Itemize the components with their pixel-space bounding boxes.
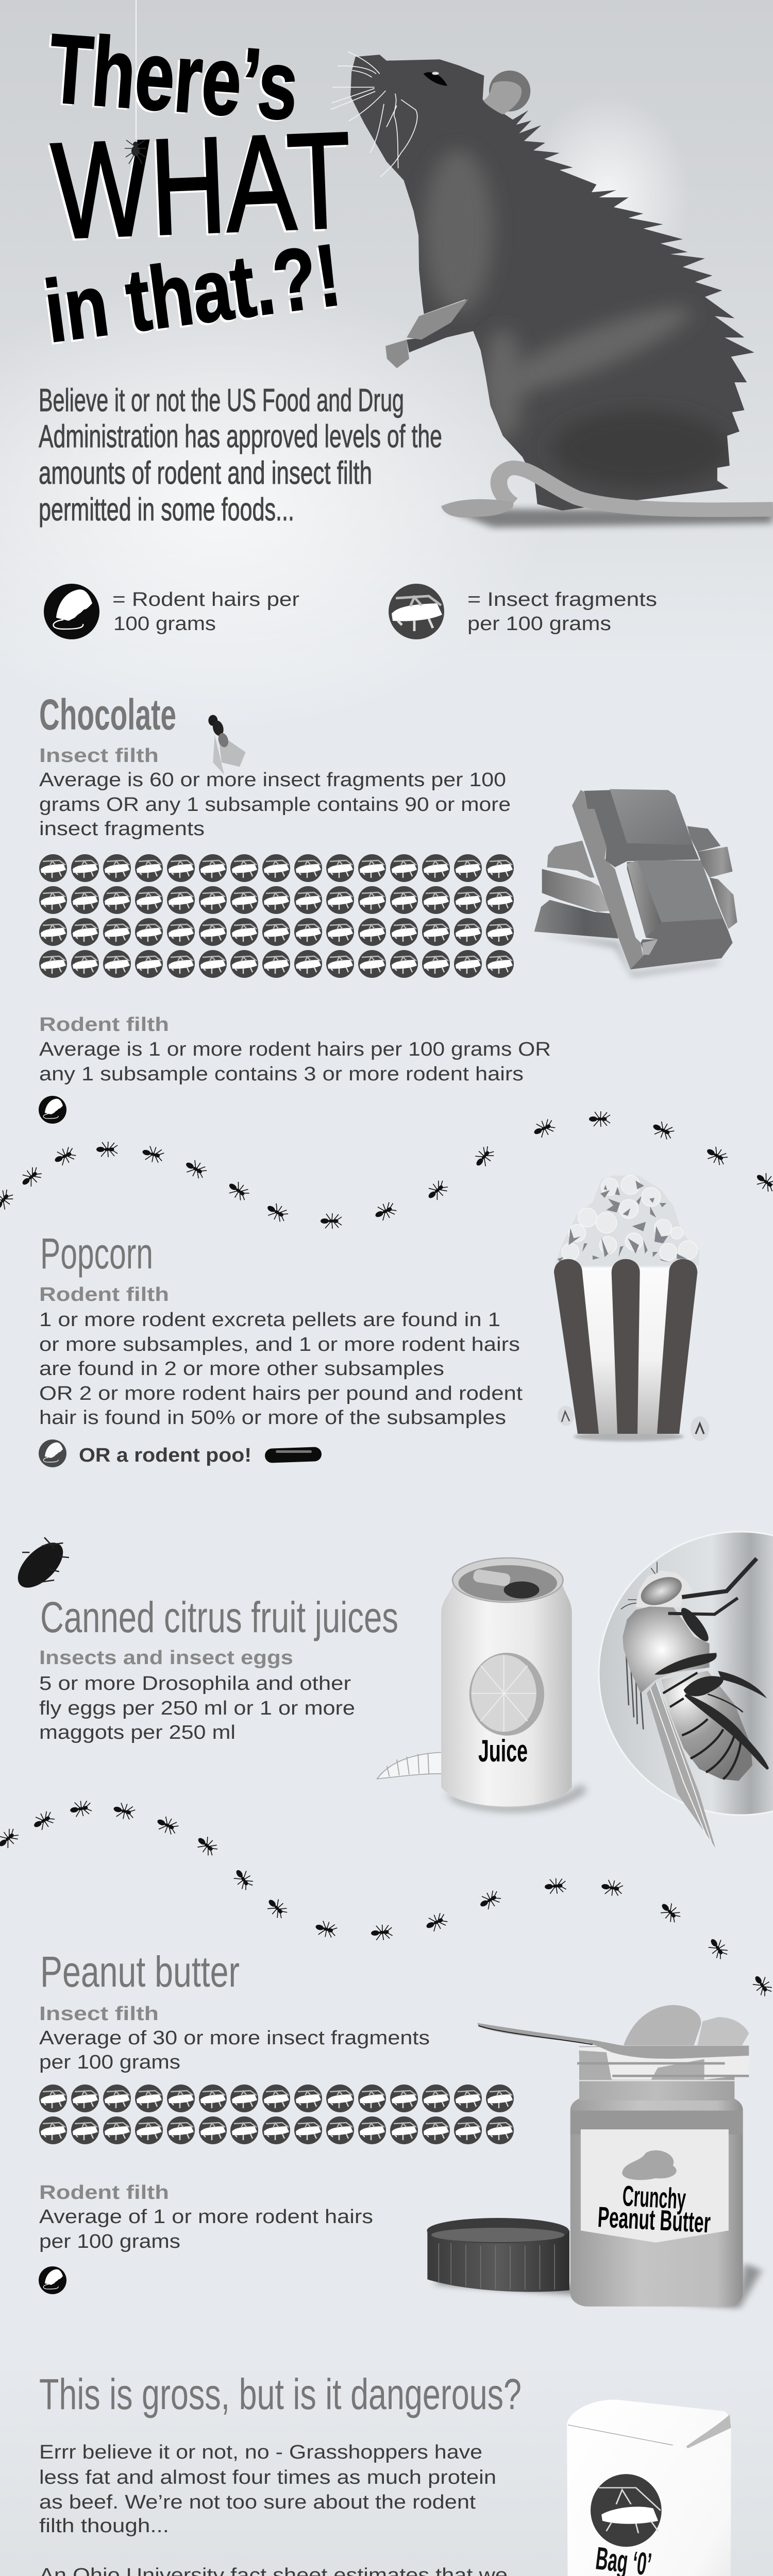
jar label text: Crunchy xyxy=(621,2179,687,2215)
insect filth text xyxy=(39,769,511,840)
rodent filth text: any 1 subsample contains 3 or more rodent hairs xyxy=(39,1063,524,1085)
heading: Peanut butter xyxy=(40,1947,240,1996)
fly abdomen xyxy=(661,1671,752,1781)
title xyxy=(38,13,354,363)
illustration: bag of bug bits xyxy=(567,2400,773,2576)
legend: insect fragments xyxy=(389,584,657,639)
rodent filth text: are found in 2 or more other subsamples xyxy=(39,1358,444,1380)
rat forepaws, tail and foot xyxy=(385,299,773,517)
peanut butter lumps and spoon xyxy=(478,2005,749,2080)
rodent or poo row: OR a rodent poo! xyxy=(79,1445,251,1466)
rodent filth text: hair is found in 50% or more of the subsamples xyxy=(39,1407,506,1429)
heading: Popcorn xyxy=(40,1229,153,1278)
paragraph 1: as beef. We’re not too sure about the rodent xyxy=(39,2492,476,2513)
citrus slice xyxy=(469,1653,544,1736)
intro paragraph: Believe it or not the US Food and Drug xyxy=(39,383,404,418)
maggot xyxy=(377,1752,444,1779)
paragraph 1: Errr believe it or not, no - Grasshoppers have xyxy=(39,2442,482,2463)
paragraph 1: filth though... xyxy=(39,2515,169,2537)
legend: rodent hairs xyxy=(44,584,299,639)
jar label xyxy=(581,2129,729,2243)
rodent icon xyxy=(39,1096,66,1124)
jar label text xyxy=(597,2179,711,2239)
panel: popcorn xyxy=(39,1176,709,1467)
rodent filth heading: Rodent filth xyxy=(39,1014,169,1036)
insect filth heading: Insect filth xyxy=(39,2003,159,2025)
jar lid xyxy=(427,2218,569,2292)
legend: insect fragments: per 100 grams xyxy=(467,613,611,635)
icon: spider on thread xyxy=(125,0,146,164)
ant trail 2 xyxy=(0,1799,773,1998)
ant trail 1 xyxy=(0,1111,773,1229)
fly legs xyxy=(654,1558,768,1769)
body text xyxy=(39,1673,355,1743)
legend: rodent hairs: 100 grams xyxy=(113,613,216,635)
rodent filth text: or more subsamples, and 1 or more rodent hairs xyxy=(39,1334,520,1355)
rodent filth text: per 100 grams xyxy=(39,2231,180,2252)
juice label: Juice xyxy=(478,1734,528,1768)
body text: 5 or more Drosophila and other xyxy=(39,1673,351,1694)
title: WHAT xyxy=(47,106,352,269)
bag text xyxy=(588,2540,660,2576)
title: WHAT xyxy=(49,104,354,267)
title: in that.?! xyxy=(39,226,346,361)
subheading: Insects and insect eggs xyxy=(39,1647,293,1669)
rodent filth text xyxy=(39,1309,523,1429)
insect filth text: insect fragments xyxy=(39,818,205,840)
rodent filth text: Average is 1 or more rodent hairs per 100 grams OR xyxy=(39,1039,551,1060)
intro paragraph: amounts of rodent and insect filth xyxy=(39,455,372,491)
heading: Chocolate xyxy=(39,690,176,739)
insect filth text: grams OR any 1 subsample contains 90 or more xyxy=(39,794,511,816)
insect filth text xyxy=(39,2027,430,2073)
heading: This is gross, but is it dangerous? xyxy=(39,2370,522,2418)
panel: this is gross xyxy=(39,2370,773,2576)
rat eye xyxy=(424,72,447,86)
fly thorax xyxy=(623,1606,710,1693)
paragraph 1: less fat and almost four times as much protein xyxy=(39,2467,496,2488)
icon: cockroach xyxy=(9,1536,72,1595)
illustration: peanut butter jar and lid xyxy=(427,2046,762,2308)
rodent filth heading: Rodent filth xyxy=(39,2182,169,2204)
rodent filth text: OR 2 or more rodent hairs per pound and rodent xyxy=(39,1383,523,1404)
insect filth text: per 100 grams xyxy=(39,2052,180,2073)
rodent or poo row xyxy=(39,1439,322,1467)
panel: chocolate xyxy=(39,690,737,1124)
title: There’s xyxy=(43,15,299,142)
illustration: magnified fly xyxy=(599,1532,773,1848)
rodent filth text xyxy=(39,1039,551,1085)
intro paragraph: Administration has approved levels of the xyxy=(39,419,442,454)
insect filth heading: Insect filth xyxy=(39,745,159,767)
title: in that.?! xyxy=(38,228,344,363)
intro paragraph: permitted in some foods... xyxy=(39,492,294,528)
illustration: chocolate pieces xyxy=(534,789,737,977)
popcorn kernels xyxy=(558,1406,709,1441)
legend: insect fragments: = Insect fragments xyxy=(467,589,657,611)
illustration: rat xyxy=(350,55,773,528)
rodent filth text xyxy=(39,2206,373,2252)
rat whiskers xyxy=(331,52,417,177)
fly hairs xyxy=(626,1652,643,1730)
heading: Canned citrus fruit juices xyxy=(40,1593,398,1641)
fly wing xyxy=(647,1681,715,1848)
popcorn heap xyxy=(555,1176,699,1266)
rodent filth heading: Rodent filth xyxy=(39,1284,169,1306)
illustration: popcorn bucket xyxy=(554,1176,709,1442)
rodent icon xyxy=(39,2266,66,2294)
rat ear xyxy=(483,71,530,114)
panel: canned citrus fruit juices xyxy=(39,1532,773,1848)
legend: rodent hairs: = Rodent hairs per xyxy=(112,589,299,611)
illustration: juice can and maggot xyxy=(377,1558,586,1812)
jar body xyxy=(570,2097,743,2307)
icon: rodent poo xyxy=(265,1447,322,1463)
insect icon grid xyxy=(39,854,514,978)
rodent filth text: 1 or more rodent excreta pellets are found in 1 xyxy=(39,1309,500,1331)
rodent filth text: Average of 1 or more rodent hairs xyxy=(39,2206,373,2228)
body text: fly eggs per 250 ml or 1 or more xyxy=(39,1698,355,1719)
paragraph 1 xyxy=(39,2442,496,2537)
fly head xyxy=(621,1562,693,1611)
body text: maggots per 250 ml xyxy=(39,1722,236,1743)
panel: peanut butter xyxy=(39,1947,762,2308)
insect filth text: Average of 30 or more insect fragments xyxy=(39,2027,430,2049)
bag icon xyxy=(591,2474,662,2547)
insect filth text: Average is 60 or more insect fragments per 100 xyxy=(39,769,506,791)
intro paragraph xyxy=(39,383,442,528)
icon: fly xyxy=(208,715,246,774)
rat face details xyxy=(331,52,447,177)
title: There’s xyxy=(45,13,301,141)
insect icon grid xyxy=(39,2084,514,2144)
